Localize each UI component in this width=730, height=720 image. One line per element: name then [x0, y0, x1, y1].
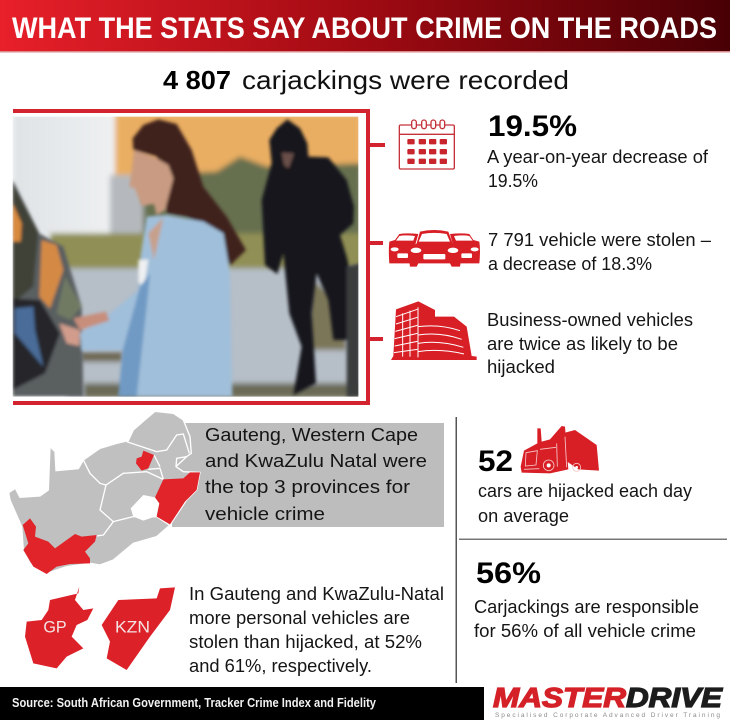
subtitle: carjackings recorded: carjackings were recorded: [242, 65, 569, 95]
text: personal vehicles stolen vs hijacked: more personal vehicles are: [189, 607, 410, 628]
title banner: [0, 0, 730, 52]
logo: MasterDrive: Specialised Corporate Advanced Driver Training: [495, 712, 720, 719]
map detail: Gauteng and KwaZulu-Natal: [25, 587, 175, 670]
stat: year-on-year decrease: 19.5%: [488, 110, 577, 143]
icon: office building: [391, 301, 477, 360]
map: South Africa provinces: [9, 411, 200, 574]
stat: 56% of vehicle crime: for 56% of all vehicle crime: [474, 620, 696, 641]
woman hair: [133, 119, 246, 266]
stat: year-on-year decrease: 19.5%: [488, 170, 538, 191]
stat: business-owned vehicles: are twice as likely to be: [487, 333, 678, 354]
woman shirt: [80, 215, 232, 397]
text: personal vehicles stolen vs hijacked: [189, 583, 444, 676]
subtitle: carjackings recorded: 4 807: [163, 65, 231, 95]
stat: 52 cars hijacked daily: on average: [478, 505, 569, 526]
map detail: Gauteng and KwaZulu-Natal: GP: [43, 617, 67, 636]
car: [13, 180, 83, 397]
text: personal vehicles stolen vs hijacked: stolen than hijacked, at 52%: [189, 631, 422, 652]
stat: vehicles stolen: [488, 229, 712, 274]
stat: 52 cars hijacked daily: [478, 445, 693, 526]
stat: year-on-year decrease: A year-on-year decrease of: [487, 146, 709, 167]
photo frame and connector ticks: [13, 109, 385, 405]
icon: calendar: [399, 120, 454, 169]
icon: truck: [521, 426, 599, 473]
stat: business-owned vehicles: hijacked: [487, 356, 555, 377]
stat: vehicles stolen: 7 791 vehicle were stolen –: [488, 229, 712, 250]
logo: MasterDrive: [493, 682, 723, 719]
logo: MasterDrive: MASTER: [493, 682, 627, 713]
stat: vehicles stolen: a decrease of 18.3%: [488, 253, 652, 274]
stat: business-owned vehicles: Business-owned vehicles: [487, 309, 693, 330]
map detail: Gauteng and KwaZulu-Natal: KZN: [115, 617, 150, 636]
stat: 52 cars hijacked daily: 52: [478, 445, 513, 478]
man: [262, 119, 354, 395]
stat: 56% of vehicle crime: Carjackings are responsible: [474, 596, 699, 617]
stat: year-on-year decrease: [487, 110, 709, 191]
photo: woman at car door with hooded man behind: [13, 113, 363, 398]
grey callout: top 3 provinces: and KwaZulu Natal were: [205, 450, 427, 471]
stat: business-owned vehicles: [487, 309, 693, 377]
footer: source bar: [0, 687, 484, 720]
footer: source bar: Source: South African Government, Tracker Crime Index and Fidelity: [12, 696, 376, 710]
stat: 56% of vehicle crime: [474, 557, 699, 641]
logo: MasterDrive: DRIVE: [626, 682, 723, 713]
text: personal vehicles stolen vs hijacked: and 61%, respectively.: [189, 655, 372, 676]
woman face: [129, 150, 173, 215]
icon: cars: [389, 230, 480, 267]
stat: 52 cars hijacked daily: cars are hijacked each day: [478, 480, 693, 501]
text: personal vehicles stolen vs hijacked: In Gauteng and KwaZulu-Natal: [189, 583, 444, 604]
grey callout: top 3 provinces: [172, 423, 444, 527]
grey callout: top 3 provinces: vehicle crime: [205, 503, 325, 524]
grey callout: top 3 provinces: the top 3 provinces for: [205, 476, 410, 497]
stat: 56% of vehicle crime: 56%: [476, 557, 541, 590]
grey callout: top 3 provinces: Gauteng, Western Cape: [205, 424, 418, 445]
